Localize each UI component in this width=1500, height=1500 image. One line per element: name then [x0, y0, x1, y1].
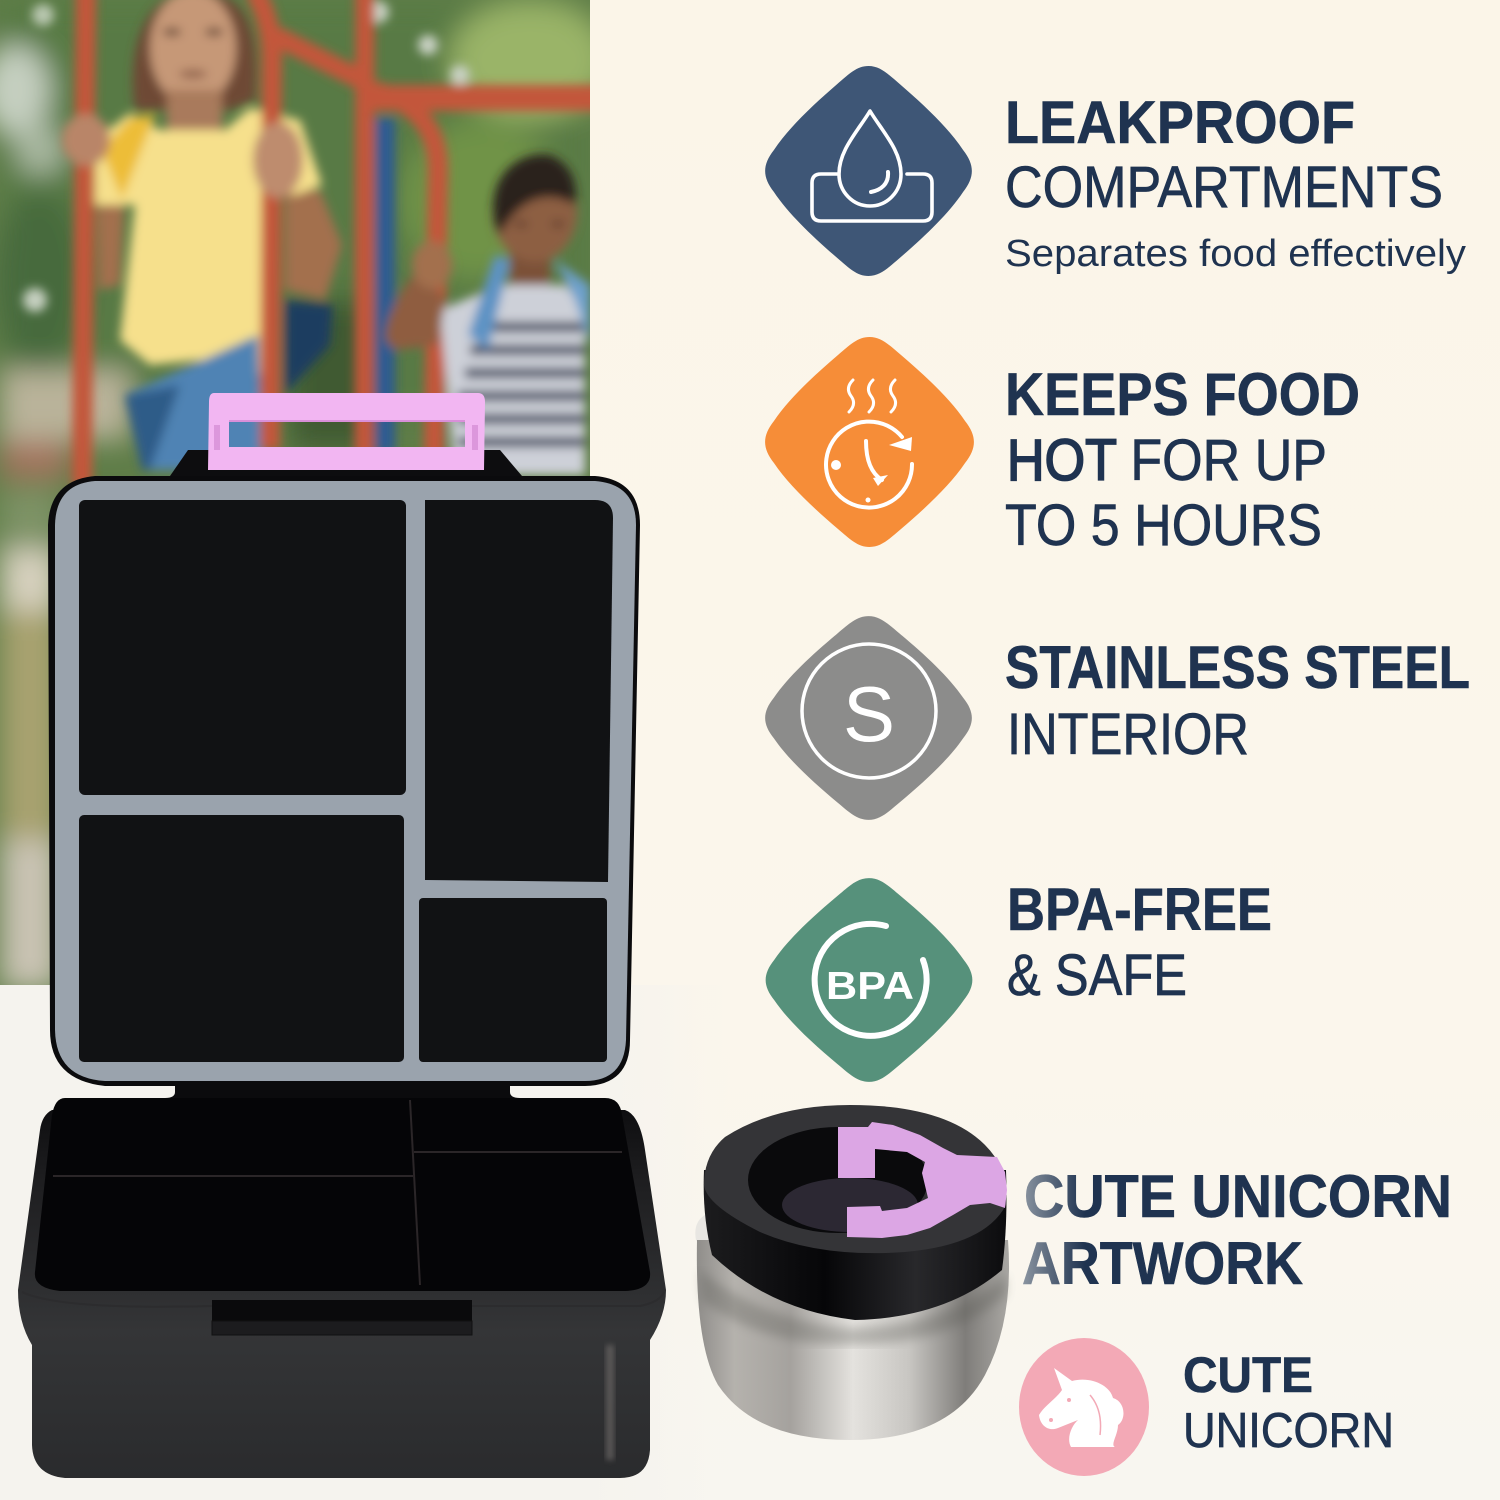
heading: cute unicorn artwork: ARTWORK — [1022, 1230, 1303, 1297]
heading: leakproof compartments: COMPARTMENTS — [1005, 155, 1443, 220]
lid hinge — [165, 1075, 520, 1098]
heading: cute unicorn artwork — [1022, 1163, 1452, 1297]
heading: cute unicorn artwork: CUTE UNICORN — [1024, 1163, 1452, 1230]
text: cute unicorn — [1183, 1347, 1394, 1458]
box base — [18, 1098, 666, 1478]
text: cute unicorn: UNICORN — [1183, 1404, 1394, 1458]
product: stainless food jar — [695, 1105, 1009, 1440]
lid compartment: top left — [79, 500, 406, 795]
heading: leakproof compartments — [1005, 89, 1443, 220]
table surface — [0, 985, 730, 1500]
text: cute unicorn: CUTE — [1183, 1347, 1313, 1403]
feature: stainless steel — [765, 616, 1470, 820]
jar opening — [748, 1127, 928, 1233]
blue post — [375, 118, 395, 453]
lid top tabs — [170, 450, 522, 476]
icon: water drop on tray — [765, 66, 972, 276]
jar body shading — [700, 1270, 1006, 1345]
photo: children at playground — [0, 0, 610, 990]
heading: stainless steel interior: INTERIOR — [1007, 702, 1249, 767]
heading: keeps food hot — [1005, 361, 1360, 558]
heading: leakproof compartments: LEAKPROOF — [1005, 89, 1355, 156]
heading: keeps food hot: KEEPS FOOD — [1005, 361, 1360, 428]
icon: S in circle: S — [843, 670, 895, 758]
lid compartment: top right — [425, 500, 613, 882]
red pole front — [254, 0, 272, 450]
red frame back — [82, 0, 600, 480]
feature: BPA-free — [766, 876, 1272, 1082]
open lid — [48, 476, 640, 1086]
icon: BPA badge — [766, 878, 972, 1082]
heading: keeps food hot: HOT FOR UP — [1007, 428, 1327, 493]
heading: BPA-free and safe: BPA-FREE — [1007, 876, 1272, 943]
jar handle — [838, 1122, 1007, 1238]
heading: stainless steel interior — [1005, 634, 1470, 767]
feature: keeps food hot — [765, 337, 1360, 558]
icon: unicorn badge — [1019, 1338, 1149, 1476]
heading: BPA-free and safe — [1007, 876, 1272, 1008]
heading: BPA-free and safe: & SAFE — [1007, 943, 1187, 1008]
lid compartment: bottom right — [419, 898, 607, 1062]
base dividers — [53, 1100, 622, 1285]
jar body — [697, 1240, 1009, 1440]
boy — [510, 250, 550, 295]
icon: steam and clock — [765, 337, 974, 547]
feature: cute unicorn — [1019, 1338, 1394, 1476]
bokeh — [32, 4, 54, 26]
icon: BPA badge: BPA — [826, 965, 914, 1008]
jar lid — [704, 1105, 1007, 1320]
feature: leakproof — [765, 66, 1466, 276]
product: lunch box — [18, 393, 666, 1478]
latch — [212, 1300, 472, 1335]
lid handle — [208, 393, 485, 470]
girl — [133, 0, 256, 110]
jar clip — [695, 1212, 712, 1262]
heading: keeps food hot: TO 5 HOURS — [1005, 493, 1322, 558]
lid compartment: bottom left — [79, 815, 404, 1062]
text: separates food: Separates food effectively — [1005, 233, 1466, 275]
icon: S in circle — [765, 616, 972, 820]
base highlight — [606, 1345, 614, 1460]
